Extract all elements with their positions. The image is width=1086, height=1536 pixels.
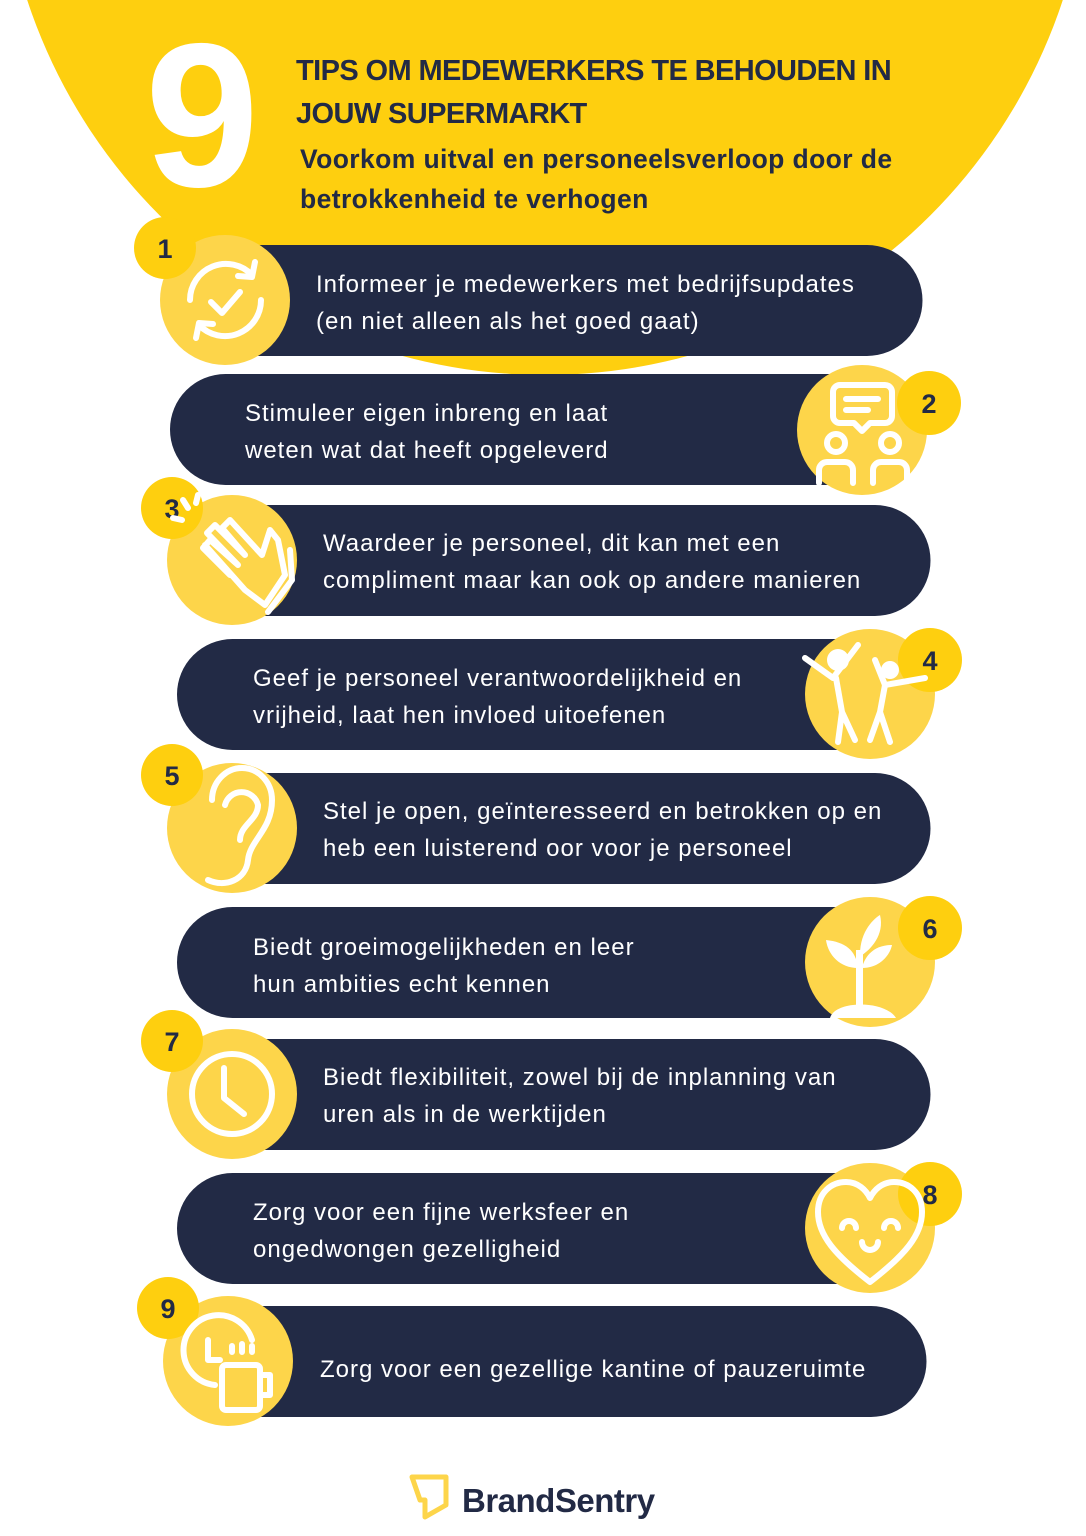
tip 7 [141,1010,930,1159]
title [296,55,891,130]
tip 2: weten wat dat heeft opgeleverd [244,437,609,464]
tip 9: Zorg voor een gezellige kantine of pauzeruimte [320,1356,866,1383]
icon: clapping hands [173,495,292,612]
icon: plant [826,915,896,1018]
tip 8: 8 [922,1180,938,1210]
title: JOUW SUPERMARKT [296,98,588,130]
tip 3: 3 [164,494,180,524]
tip 2: 2 [921,389,937,419]
tip 1 [134,217,922,365]
subtitle: betrokkenheid te verhogen [300,184,649,214]
tip 1: 1 [157,234,173,264]
tip 1: (en niet alleen als het goed gaat) [316,308,700,335]
tip 6: 6 [922,914,938,944]
icon: ear [208,768,272,883]
icon: clock and cup [184,1315,270,1410]
tip 9 [137,1277,927,1426]
tip 8 [177,1162,962,1293]
icon: shield B [412,1477,446,1517]
tip 3 [141,477,930,625]
tip 5: Stel je open, geïnteresseerd en betrokken op en [323,798,882,825]
tip 3: Waardeer je personeel, dit kan met een [323,530,780,557]
tip 2: Stimuleer eigen inbreng en laat [245,400,608,427]
tip 6 [177,896,962,1027]
tip 4: vrijheid, laat hen invloed uitoefenen [253,702,666,729]
big number 9: 9 [145,1,259,230]
tip 8: Zorg voor een fijne werksfeer en [253,1199,629,1226]
tip 3: compliment maar kan ook op andere manieren [323,567,861,594]
logo [412,1477,656,1519]
tip 8: ongedwongen gezelligheid [253,1236,561,1263]
subtitle [300,144,892,214]
icon: jumping people [827,649,899,679]
logo: BrandSentry [462,1482,656,1519]
tip 7: 7 [164,1027,180,1057]
icon: heart smile [818,1182,922,1282]
subtitle: Voorkom uitval en personeelsverloop door de [300,144,892,174]
tip 5: 5 [164,761,180,791]
tip 1: Informeer je medewerkers met bedrijfsupdates [316,271,855,298]
tip 4 [177,628,962,759]
tip 7: Biedt flexibiliteit, zowel bij de inplanning van [323,1064,837,1091]
tip 5: heb een luisterend oor voor je personeel [323,835,793,862]
tip 7: uren als in de werktijden [323,1101,607,1128]
yellow header shape [0,0,1086,375]
title: TIPS OM MEDEWERKERS TE BEHOUDEN IN [296,55,891,87]
tip 2 [170,365,961,495]
tip 4: Geef je personeel verantwoordelijkheid en [253,665,742,692]
tip 4: 4 [922,646,938,676]
tip 9: 9 [160,1294,176,1324]
icon: people talking [819,385,907,483]
tip 5 [141,744,930,893]
icon: refresh check [190,262,261,338]
tip 6: hun ambities echt kennen [253,971,551,998]
icon: clock [192,1054,272,1134]
tip 6: Biedt groeimogelijkheden en leer [253,934,635,961]
